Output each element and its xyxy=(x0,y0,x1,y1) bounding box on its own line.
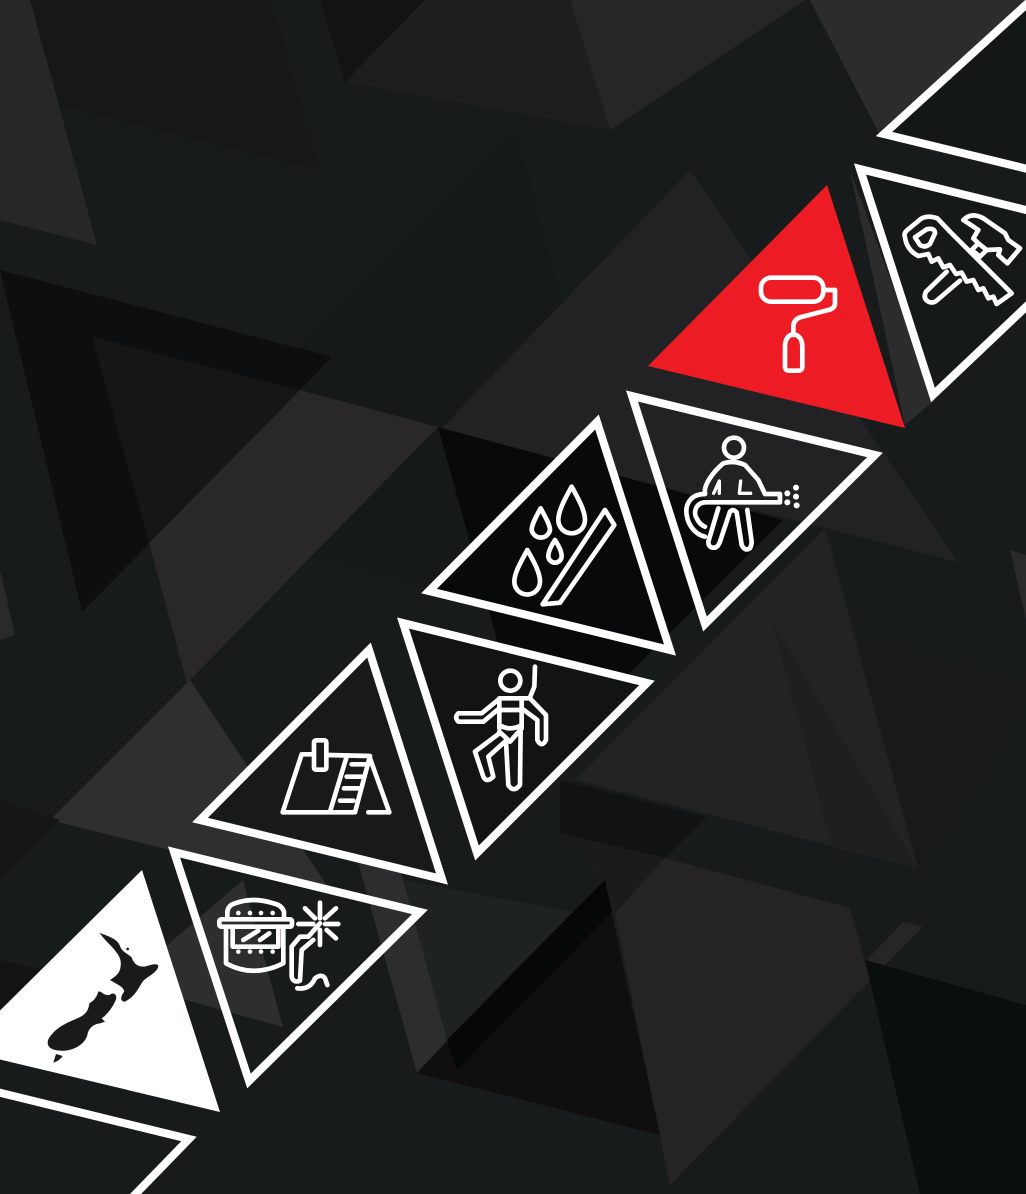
triangle: tools outline xyxy=(860,169,1026,395)
triangle: red roller panel xyxy=(648,185,905,428)
triangle: spray outline xyxy=(632,396,875,624)
icon: paint roller xyxy=(761,278,835,371)
icon: saw and hammer xyxy=(905,215,1020,304)
icon: spray worker xyxy=(686,438,800,549)
icon: safety harness worker xyxy=(456,667,546,789)
triangle: tent outline xyxy=(200,650,442,879)
triangle: white New Zealand panel xyxy=(0,870,220,1112)
icon: water drops and slat xyxy=(514,487,614,604)
triangle: harness outline xyxy=(403,623,647,853)
triangle: water outline xyxy=(429,422,670,650)
triangle: welding outline xyxy=(174,852,420,1081)
icon: tent / tarp xyxy=(283,740,389,812)
triangle: partial bottom outline xyxy=(0,1083,189,1194)
icon: welding helmet and torch xyxy=(219,900,338,989)
triangle: partial top right outline xyxy=(884,0,1026,172)
icon: New Zealand map xyxy=(48,933,158,1063)
